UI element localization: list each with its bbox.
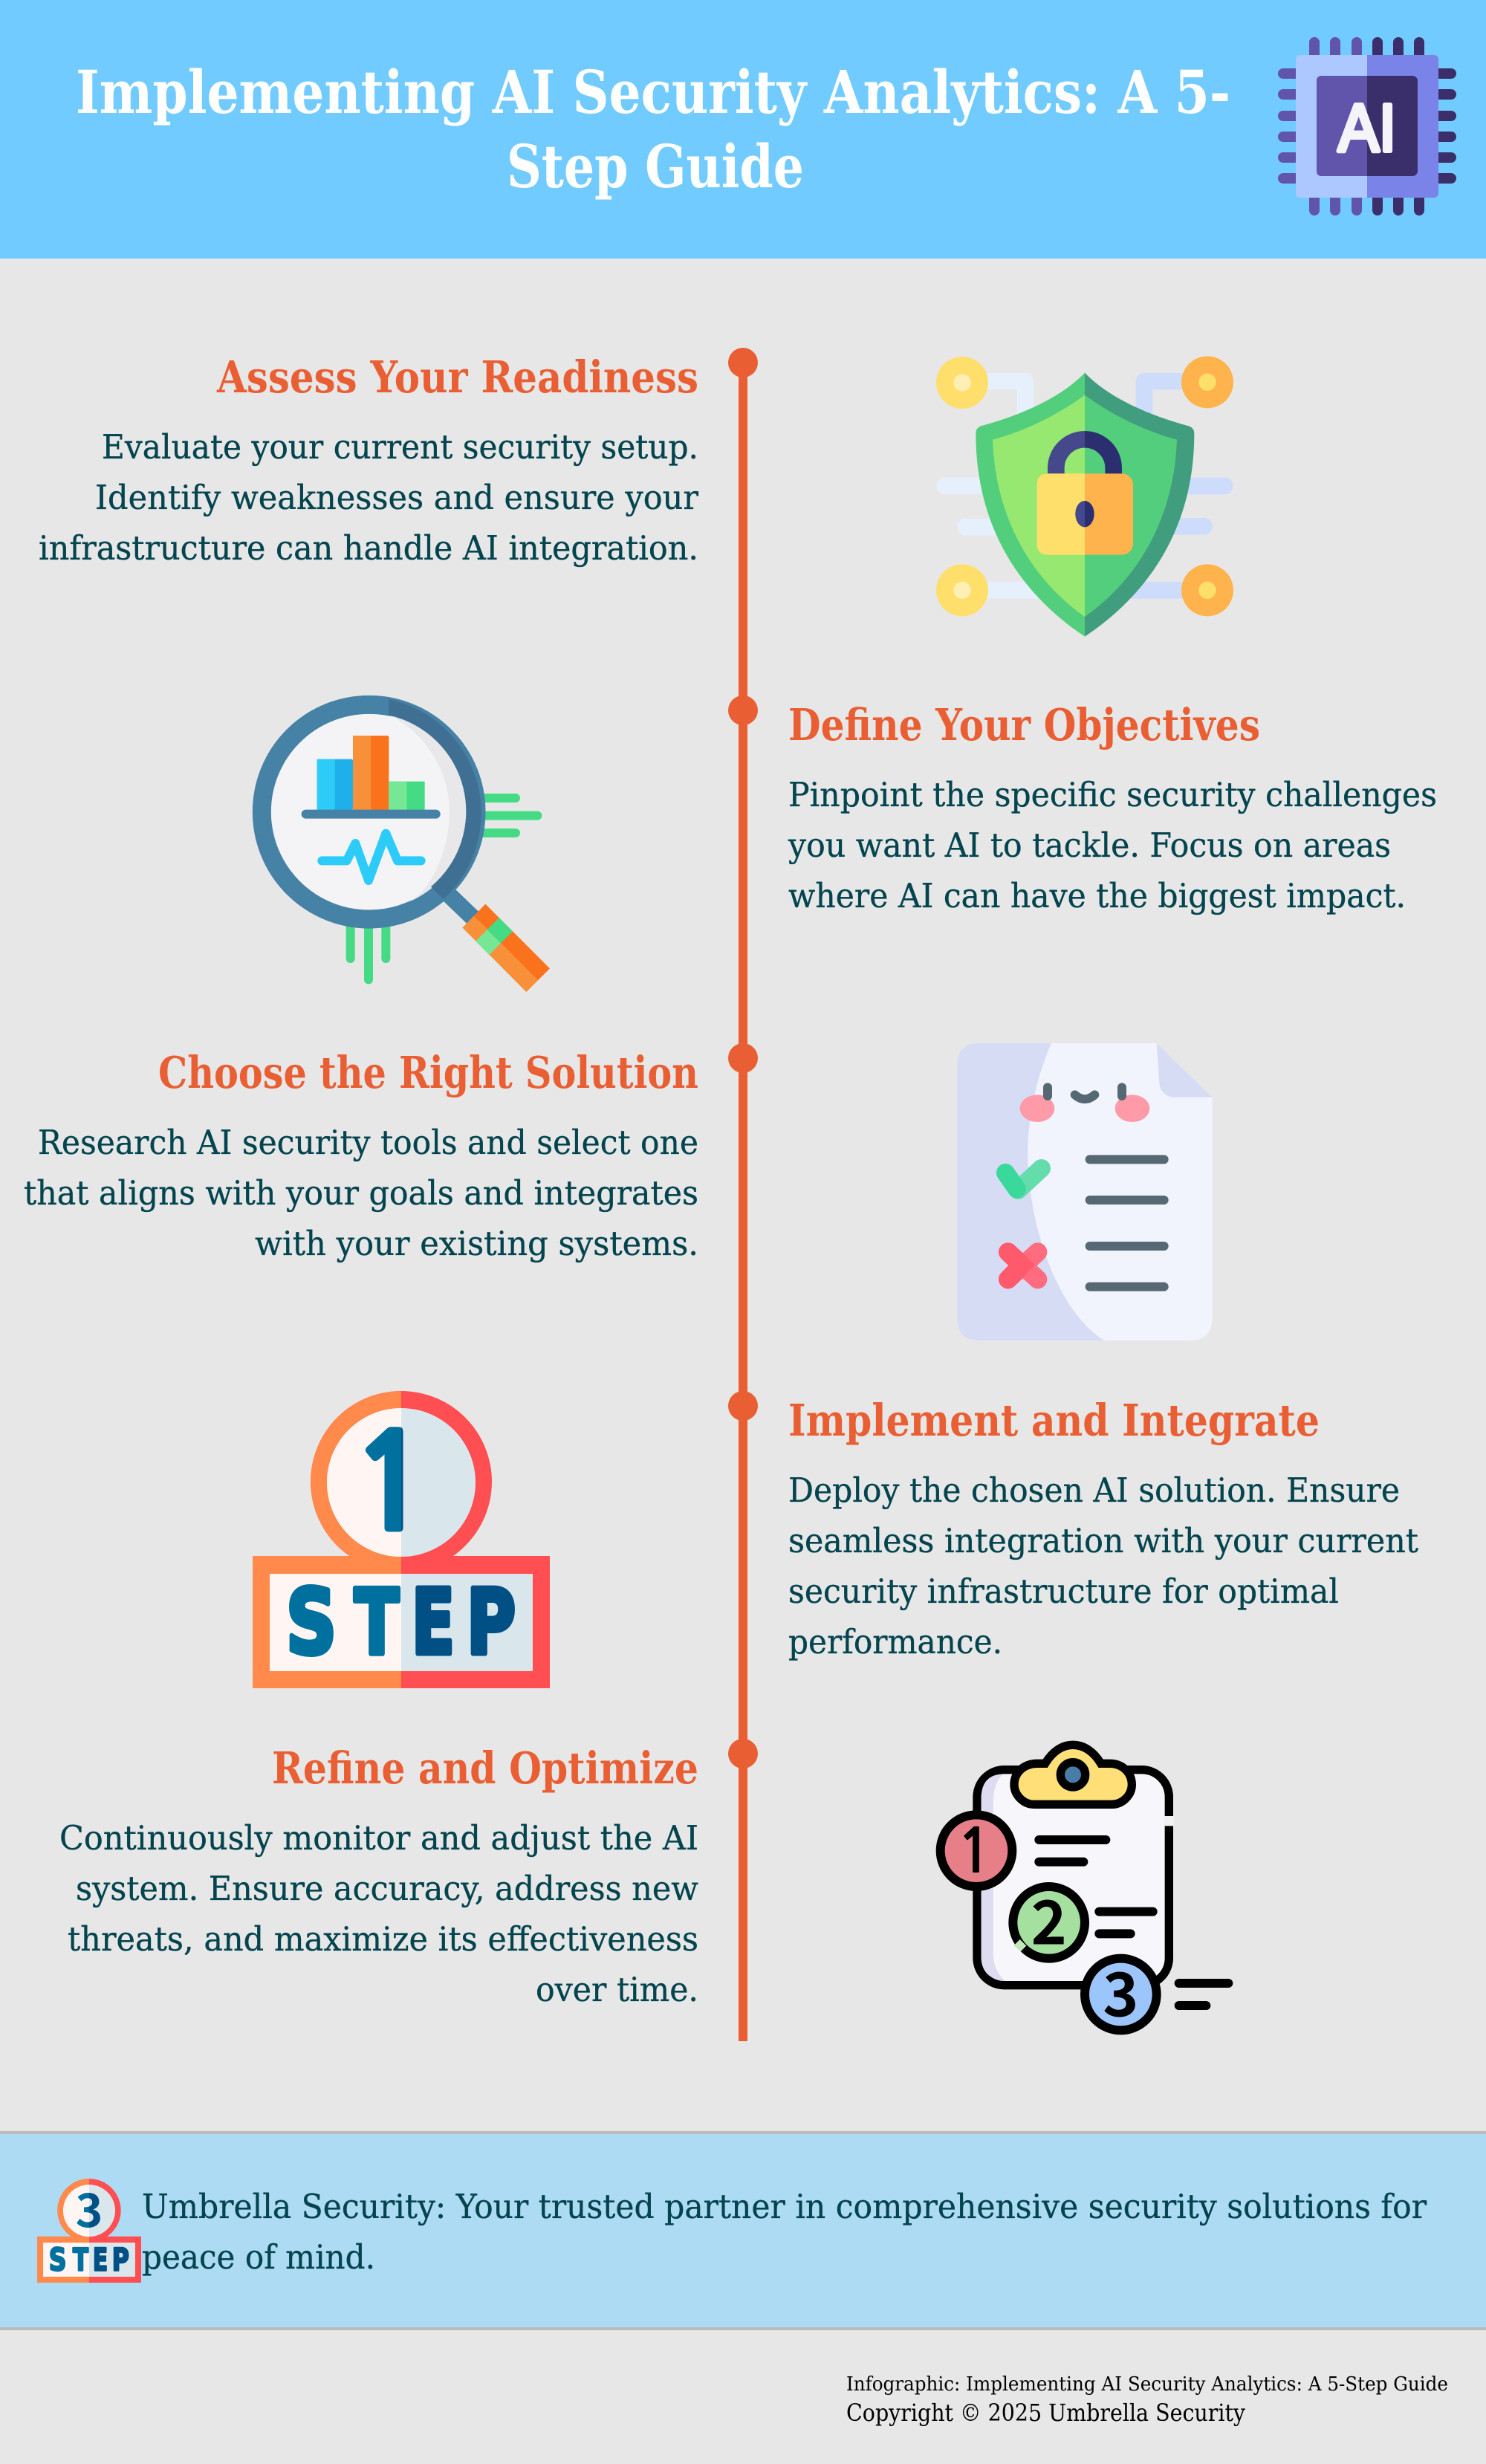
icon: step 1 badge: P [467,1572,516,1675]
footer credits [846,2373,1448,2427]
icon: step 1 badge [253,1391,550,1688]
text block: step 4 description: performance. [788,1622,1002,1661]
icon: step 3 badge: E [93,2242,108,2278]
text block: step 3 description: with your existing systems. [255,1224,698,1263]
text block: step 2 description: you want AI to tackle. Focus on areas [788,826,1391,865]
footer credits: Infographic: Implementing AI Security Analytics: A 5-Step Guide [846,2373,1448,2396]
header banner [0,0,1486,259]
closing statement: Umbrella Security: Your trusted partner in comprehensive security solutions for [142,2187,1427,2226]
text block: step 5 description: threats, and maximize its effectiveness [68,1919,698,1959]
text block: step 2 description [788,775,1437,915]
panel: step 3 Choose the Right Solution [24,1043,1213,1340]
icon: numbered clipboard: 3 [1103,1945,1138,2034]
text block: step 3 description: Research AI security tools and select one [38,1123,698,1162]
text block: step 3 description: that aligns with your goals and integrates [24,1173,698,1213]
icon: step 3 badge: T [73,2242,88,2278]
icon: numbered clipboard [941,1745,1228,2034]
text block: step 1 description: infrastructure can handle AI integration. [39,528,698,568]
text block: step 4 description: Deploy the chosen AI solution. Ensure [788,1471,1400,1510]
heading: Choose the Right Solution: Choose the Right Solution [158,1047,698,1098]
icon: step 3 badge: S [49,2242,67,2278]
icon: step 1 badge: E [412,1572,455,1675]
heading: Refine and Optimize: Refine and Optimize [272,1742,698,1794]
icon: step 3 badge: 3 [76,2173,103,2240]
title [76,57,1230,201]
text block: step 5 description: system. Ensure accuracy, address new [76,1869,698,1908]
panel: closing banner [0,2131,1486,2330]
title: Step Guide [507,132,804,201]
icon: step 1 badge: 1 [351,1418,431,1549]
heading: Implement and Integrate: Implement and Integrate [788,1395,1320,1446]
icon: magnifying glass with chart [262,699,550,992]
text block: step 2 description: where AI can have the biggest impact. [788,876,1406,915]
panel: step 5 Refine and Optimize [59,1742,1228,2034]
icon: step 3 badge [37,2173,141,2283]
icon: numbered clipboard: 2 [1031,1874,1067,1962]
icon: AI chip [1278,37,1456,215]
text block: step 4 description [788,1471,1418,1661]
panel: step 1 Assess Your Readiness [39,351,1233,637]
panel: step 2 Define Your Objectives [262,699,1437,992]
icon: document with checklist [957,1043,1213,1340]
closing statement: peace of mind. [142,2237,375,2277]
title: Implementing AI Security Analytics: A 5- [76,57,1230,127]
text block: step 4 description: security infrastructure for optimal [788,1572,1339,1611]
timeline [728,348,758,2041]
panel: step 4 Implement and Integrate [253,1391,1418,1688]
icon: numbered clipboard: 1 [956,1822,993,1882]
text block: step 5 description: over time. [536,1970,698,2009]
text block: step 2 description: Pinpoint the specific security challenges [788,775,1437,814]
icon: step 3 badge: P [112,2242,129,2278]
text block: step 1 description: Evaluate your current security setup. [102,427,698,467]
icon: AI chip: AI [1338,91,1396,166]
icon: shield with padlock [936,356,1233,637]
closing statement [142,2187,1427,2277]
text block: step 4 description: seamless integration with your current [788,1521,1418,1560]
footer credits: Copyright © 2025 Umbrella Security [846,2399,1245,2427]
text block: step 5 description [59,1818,698,2009]
heading: Define Your Objectives: Define Your Objectives [788,699,1260,750]
icon: step 1 badge: S [286,1572,337,1675]
text block: step 3 description [24,1123,698,1263]
text block: step 5 description: Continuously monitor and adjust the AI [59,1818,698,1858]
text block: step 1 description: Identify weaknesses and ensure your [95,478,698,517]
icon: step 1 badge: T [354,1572,399,1675]
text block: step 1 description [39,427,698,568]
heading: Assess Your Readiness: Assess Your Readiness [216,351,698,403]
